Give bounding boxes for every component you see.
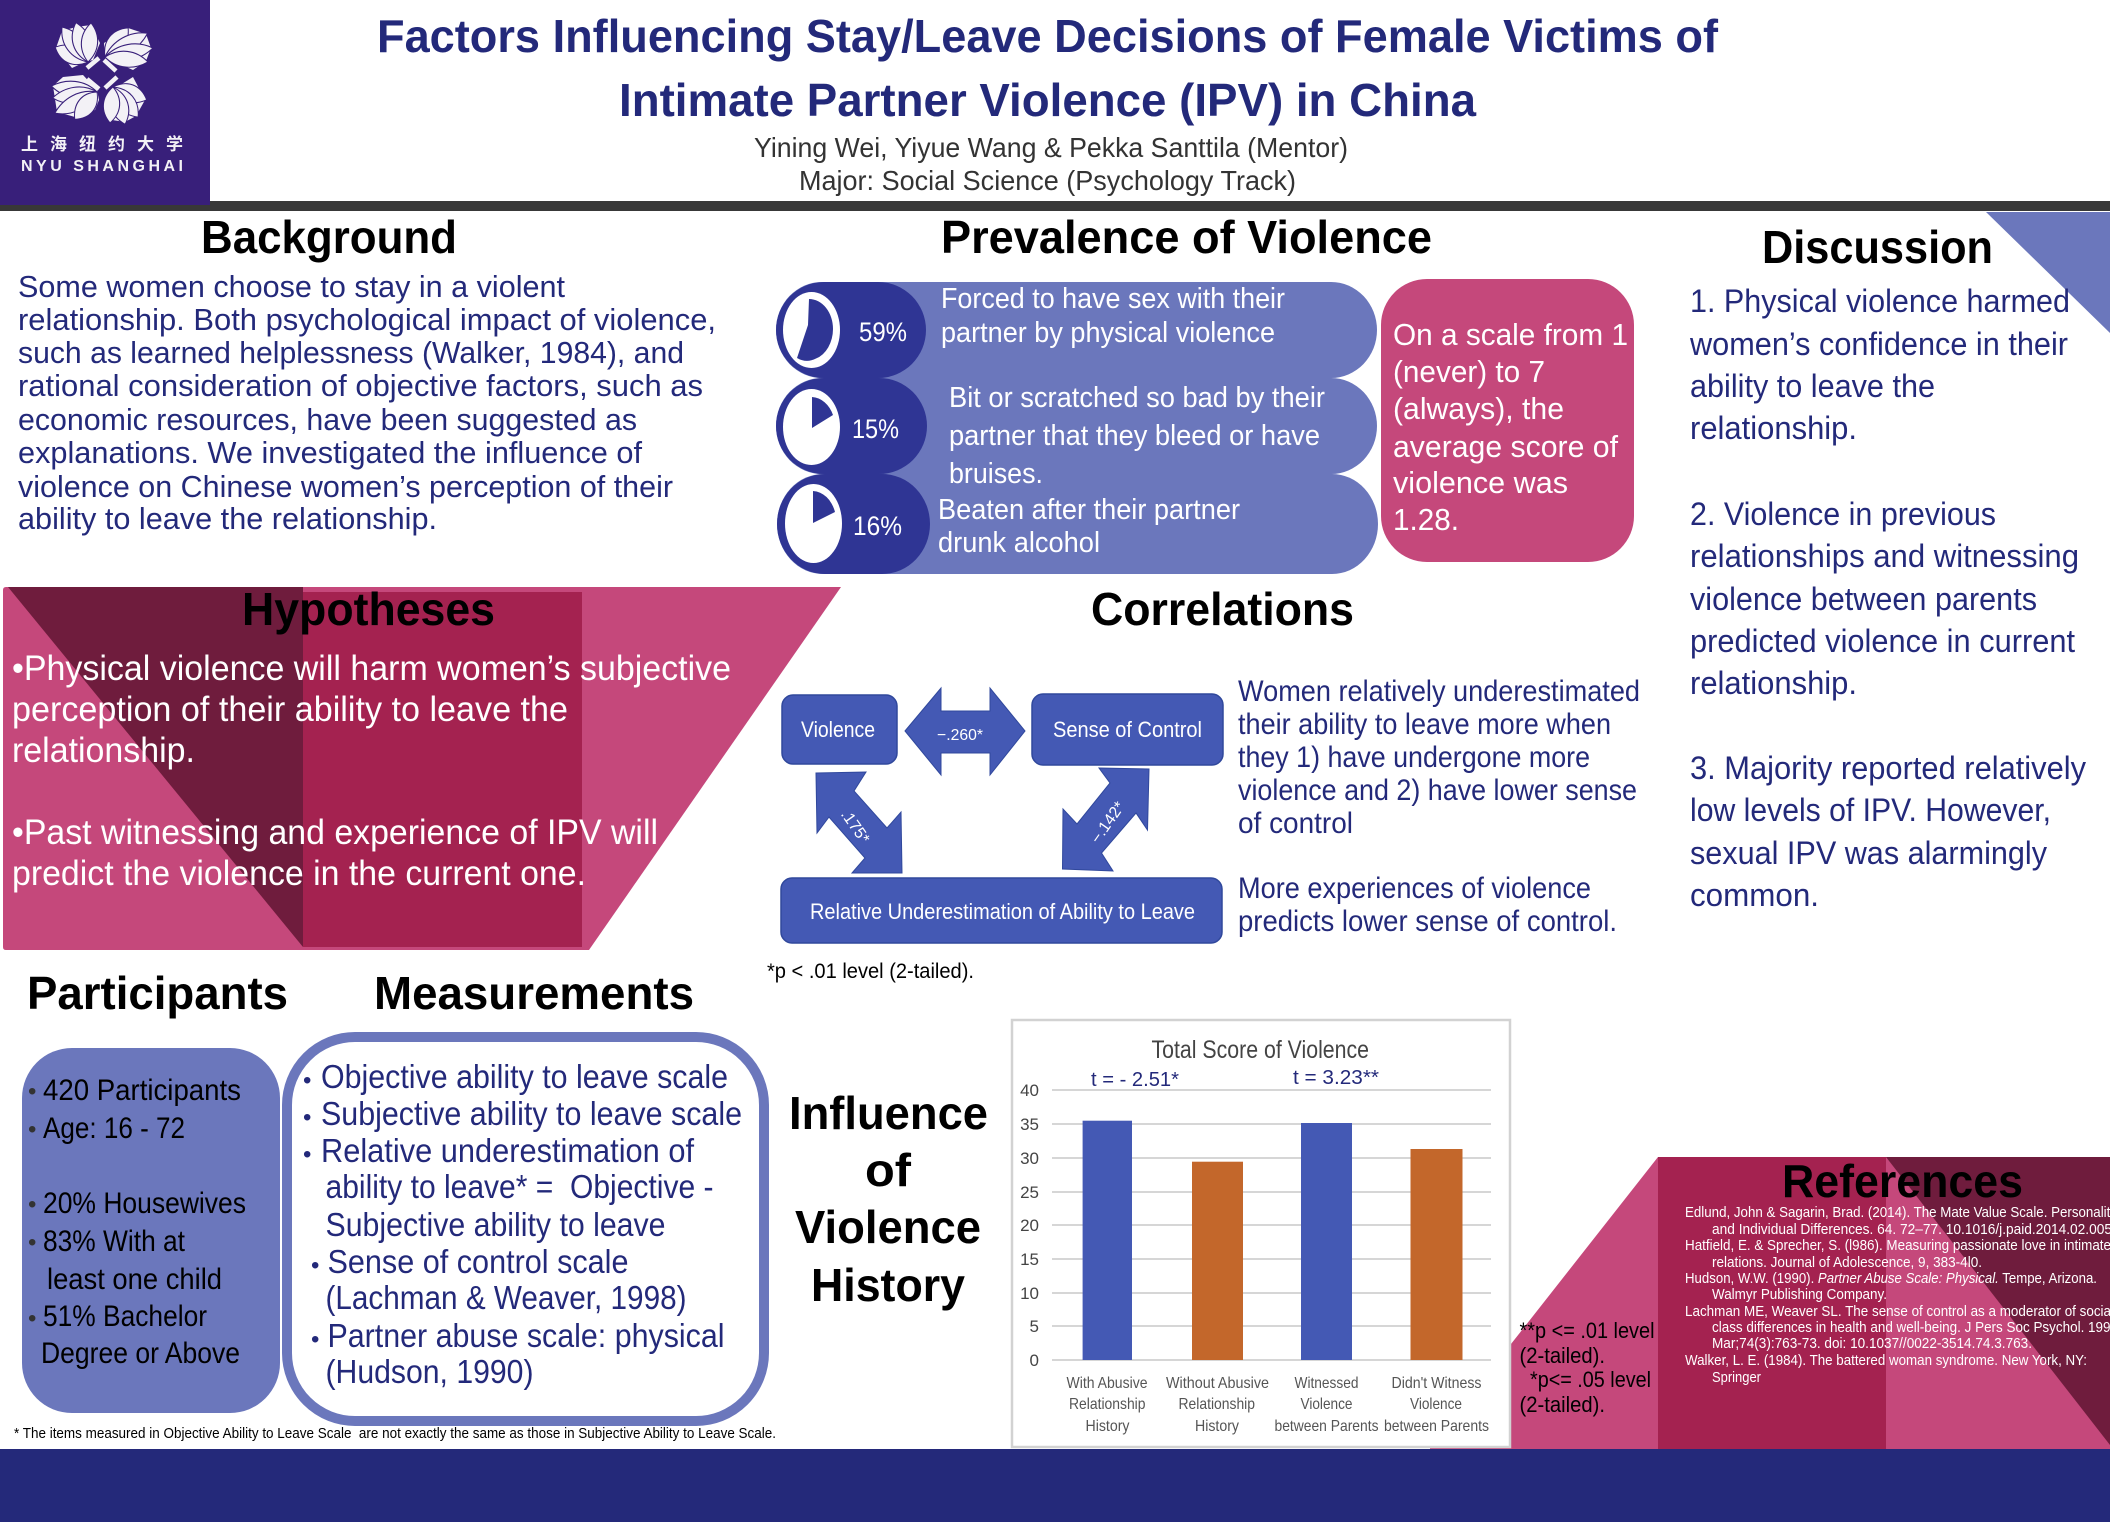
text: hypotheses list: •Past witnessing and experience of IPV will xyxy=(12,813,658,852)
title: Intimate Partner Violence (IPV) in China xyxy=(619,74,1476,126)
footnote: correlation significance: *p < .01 level (2-tailed). xyxy=(767,960,974,983)
panel: participants: • xyxy=(28,1078,36,1105)
authors and major xyxy=(754,132,1348,196)
text: discussion: 1. Physical violence harmed xyxy=(1690,283,2070,319)
text: correlation findings xyxy=(1238,675,1640,938)
text: hypotheses list: perception of their ability to leave the xyxy=(12,690,568,729)
panel: participants: • xyxy=(28,1229,36,1256)
box: relative underestimation xyxy=(781,878,1222,943)
text: references list: Hudson, W.W. (1990). Partner Abuse Scale: Physical. Tempe, Arizona. xyxy=(1685,1271,2097,1287)
heading: Influence of Violence History xyxy=(789,1087,988,1311)
x axis labels: between Parents xyxy=(1274,1418,1378,1435)
callout: average score: On a scale from 1 xyxy=(1393,317,1628,352)
footnote: measurement scales: * The items measured in Objective Ability to Leave Scale are not exactly the same as those in Subjective Ability to Leave Scale. xyxy=(14,1425,776,1442)
text: discussion: sexual IPV was alarmingly xyxy=(1690,835,2047,871)
icon: pie 16% xyxy=(785,484,842,563)
t statistic: witnessed violence: t = 3.23** xyxy=(1293,1067,1379,1089)
text: beaten xyxy=(938,494,1240,559)
text: discussion: low levels of IPV. However, xyxy=(1690,792,2051,828)
text: discussion: 3. Majority reported relatively xyxy=(1690,750,2086,786)
callout: average score: average score of xyxy=(1393,429,1618,464)
panel: measurements: • xyxy=(311,1252,319,1279)
x axis labels: Violence xyxy=(1300,1396,1353,1413)
icon: pie 59% xyxy=(783,292,840,368)
text: hypotheses list: •Physical violence will harm women’s subjective xyxy=(12,649,731,688)
text: discussion: women’s confidence in their xyxy=(1689,326,2068,362)
panel: measurements: • xyxy=(303,1104,311,1131)
header rule xyxy=(0,201,2110,211)
heading: References: References xyxy=(1782,1155,2023,1207)
authors and major: Major: Social Science (Psychology Track) xyxy=(799,165,1296,196)
panel: measurements: (Lachman & Weaver, 1998) xyxy=(326,1279,686,1316)
arrow: sense of control to underestimation xyxy=(1062,768,1149,871)
x axis labels: between Parents xyxy=(1384,1418,1489,1435)
callout: average score: (never) to 7 xyxy=(1393,354,1545,389)
diagram: correlations xyxy=(781,688,1223,943)
text: correlation findings: they 1) have undergone more xyxy=(1238,741,1590,774)
text: background: Some women choose to stay in a violent xyxy=(18,269,565,304)
x axis labels: Without Abusive xyxy=(1166,1375,1269,1392)
text: hypotheses list: predict the violence in the current one. xyxy=(12,854,586,893)
panel: measurements: Relative underestimation of xyxy=(321,1132,695,1169)
text: beaten: drunk alcohol xyxy=(938,527,1100,559)
text: references list xyxy=(1685,1205,2110,1386)
text: significance levels: (2-tailed). xyxy=(1520,1343,1605,1368)
text: discussion: predicted violence in current xyxy=(1690,623,2075,659)
text: forced sex: partner by physical violence xyxy=(941,317,1275,349)
text: bit or scratched: bruises. xyxy=(949,458,1043,490)
text: discussion: relationship. xyxy=(1690,410,1857,446)
x axis labels: Didn't Witness xyxy=(1392,1375,1482,1392)
panel: measurements: (Hudson, 1990) xyxy=(326,1353,534,1390)
panel: measurements: ability to leave* = Objective - xyxy=(326,1168,714,1205)
chart title: Total Score of Violence xyxy=(1152,1036,1369,1064)
text: discussion: violence between parents xyxy=(1690,581,2037,617)
y axis labels: 10 xyxy=(1020,1284,1039,1303)
arrow: sense of control to underestimation: −.142* xyxy=(1088,799,1129,847)
panel: measurements: Subjective ability to leave scale xyxy=(321,1095,742,1132)
x axis labels: Relationship xyxy=(1178,1396,1255,1413)
heading: Influence of Violence History: of xyxy=(865,1144,912,1196)
heading: Hypotheses: Hypotheses xyxy=(242,583,495,635)
text: correlation findings: More experiences of violence xyxy=(1238,872,1591,905)
logo: NYU Shanghai: NYU SHANGHAI xyxy=(21,158,183,175)
panel: participants: 51% Bachelor xyxy=(43,1300,207,1333)
panel: references background xyxy=(1430,1157,2110,1450)
box: relative underestimation: Relative Underestimation of Ability to Leave xyxy=(810,899,1195,924)
panel: measurements: Partner abuse scale: physical xyxy=(328,1317,724,1354)
text: references list: relations. Journal of Adolescence, 9, 383-4l0. xyxy=(1712,1255,1982,1271)
panel: measurements: Objective ability to leave scale xyxy=(321,1058,728,1095)
y axis labels: 35 xyxy=(1020,1115,1039,1134)
text: background: rational consideration of objective factors, such as xyxy=(18,368,703,403)
text: discussion: relationship. xyxy=(1690,665,1857,701)
heading: Influence of Violence History: History xyxy=(811,1259,965,1311)
text: discussion: relationships and witnessing xyxy=(1690,538,2079,574)
text: background: economic resources, have been suggested as xyxy=(18,402,637,437)
decorative corner triangle xyxy=(1986,212,2110,333)
text: significance levels: *p<= .05 level xyxy=(1530,1367,1651,1392)
panel: measurements: • xyxy=(303,1067,311,1094)
text: background: violence on Chinese women’s perception of their xyxy=(18,469,673,504)
text: correlation findings: of control xyxy=(1238,807,1353,840)
text: discussion: 2. Violence in previous xyxy=(1690,496,1996,532)
text: correlation findings: Women relatively underestimated xyxy=(1238,675,1640,708)
heading: Prevalence of Violence: Prevalence of Violence xyxy=(941,211,1432,263)
panel: participants: Age: 16 - 72 xyxy=(43,1112,185,1145)
text: hypotheses list xyxy=(12,649,731,893)
box: violence: Violence xyxy=(801,717,875,742)
panel: measurements: • xyxy=(303,1141,311,1168)
text: discussion xyxy=(1689,283,2086,913)
text: beaten: Beaten after their partner xyxy=(938,494,1240,526)
x axis labels: With Abusive xyxy=(1066,1375,1148,1392)
heading: Background: Background xyxy=(201,211,457,263)
t statistic: abuse history: t = - 2.51* xyxy=(1091,1069,1179,1091)
panel: participants: 83% With at xyxy=(43,1225,186,1258)
arrow: violence to sense of control xyxy=(905,688,1025,775)
heading: Influence of Violence History: Violence xyxy=(795,1201,981,1253)
text: background: relationship. Both psychological impact of violence, xyxy=(18,302,716,337)
panel: measurements: Subjective ability to leave xyxy=(326,1206,666,1243)
heading: Measurements: Measurements xyxy=(374,967,694,1019)
box: sense of control: Sense of Control xyxy=(1053,717,1202,742)
panel: measurements: Sense of control scale xyxy=(328,1243,628,1280)
heading: Influence of Violence History: Influence xyxy=(789,1087,988,1139)
title: Factors Influencing Stay/Leave Decisions of Female Victims of xyxy=(377,10,1719,62)
y axis labels: 15 xyxy=(1020,1250,1039,1269)
callout: average score: 1.28. xyxy=(1393,502,1459,537)
panel: participants: • xyxy=(28,1305,36,1332)
text: forced sex: Forced to have sex with their xyxy=(941,283,1285,315)
panel: measurements: • xyxy=(311,1326,319,1353)
x axis labels xyxy=(1066,1375,1489,1435)
x axis labels: Witnessed xyxy=(1294,1375,1358,1392)
text: correlation findings: violence and 2) have lower sense xyxy=(1238,774,1637,807)
box: sense of control xyxy=(1032,694,1223,765)
text: bit or scratched xyxy=(949,382,1325,490)
text: background xyxy=(18,269,716,536)
heading: Correlations: Correlations xyxy=(1091,583,1354,635)
panel: measurements xyxy=(287,1037,764,1421)
logo: NYU Shanghai xyxy=(0,0,210,205)
arrow: violence to sense of control: −.260* xyxy=(937,727,983,744)
text: references list: Walmyr Publishing Company. xyxy=(1712,1287,1887,1303)
y axis labels: 40 xyxy=(1020,1081,1039,1100)
title xyxy=(377,10,1719,126)
x axis labels: Violence xyxy=(1410,1396,1462,1413)
panel: participants: 20% Housewives xyxy=(43,1187,246,1220)
text: significance levels xyxy=(1520,1318,1654,1417)
callout: average score: violence was xyxy=(1393,465,1568,500)
y axis labels: 0 xyxy=(1030,1351,1039,1370)
heading: Discussion: Discussion xyxy=(1762,221,1993,273)
panel: participants: 420 Participants xyxy=(43,1074,241,1107)
arrow: violence to underestimation xyxy=(816,772,902,873)
text: background: ability to leave the relationship. xyxy=(18,501,437,536)
callout: average score xyxy=(1381,279,1634,562)
label: 59 percent: 59% xyxy=(859,317,907,347)
text: significance levels: (2-tailed). xyxy=(1520,1392,1605,1417)
text: correlation findings: predicts lower sense of control. xyxy=(1238,905,1617,938)
text: bit or scratched: Bit or scratched so bad by their xyxy=(949,382,1325,414)
y axis labels: 5 xyxy=(1030,1317,1039,1336)
box: violence xyxy=(782,695,897,764)
label: 16 percent: 16% xyxy=(853,511,902,541)
icon: pie 15% xyxy=(783,389,840,465)
text: references list: Mar;74(3):763-73. doi: 10.1037//0022-3514.74.3.763. xyxy=(1712,1336,2032,1352)
y axis labels xyxy=(1020,1081,1039,1370)
footer band xyxy=(0,1449,2110,1522)
text: forced sex xyxy=(941,283,1285,349)
chart: total score of violence xyxy=(1012,1020,1510,1447)
text: bit or scratched: partner that they bleed or have xyxy=(949,420,1320,452)
text: references list: Springer xyxy=(1712,1370,1761,1386)
text: hypotheses list: relationship. xyxy=(12,731,195,770)
text: references list: Walker, L. E. (1984). The battered woman syndrome. New York, NY: xyxy=(1685,1353,2087,1369)
text: discussion: common. xyxy=(1690,877,1819,913)
y axis labels: 30 xyxy=(1020,1149,1039,1168)
panel: participants: • xyxy=(28,1116,36,1143)
panel: participants: • xyxy=(28,1191,36,1218)
text: significance levels: **p <= .01 level xyxy=(1520,1318,1654,1343)
x axis labels: History xyxy=(1195,1418,1239,1435)
x axis labels: History xyxy=(1086,1418,1130,1435)
text: discussion: ability to leave the xyxy=(1690,368,1935,404)
panel: participants: least one child xyxy=(47,1263,222,1296)
heading: Participants: Participants xyxy=(27,967,288,1019)
y axis labels: 25 xyxy=(1020,1183,1039,1202)
label: 15 percent: 15% xyxy=(852,414,899,444)
panel: participants: Degree or Above xyxy=(41,1337,240,1370)
arrow: violence to underestimation: .175* xyxy=(837,807,872,847)
panel: prevalence pills xyxy=(776,282,1378,574)
text: correlation findings: their ability to leave more when xyxy=(1238,708,1611,741)
logo: NYU Shanghai: 上海纽约大学 xyxy=(21,134,183,154)
text: background: explanations. We investigated the influence of xyxy=(18,435,642,470)
y axis labels: 20 xyxy=(1020,1216,1039,1235)
callout: average score: (always), the xyxy=(1393,391,1564,426)
panel: hypotheses xyxy=(3,583,841,950)
panel: participants xyxy=(22,1048,280,1413)
x axis labels: Relationship xyxy=(1069,1396,1146,1413)
text: background: such as learned helplessness (Walker, 1984), and xyxy=(18,335,684,370)
authors and major: Yining Wei, Yiyue Wang & Pekka Santtila (Mentor) xyxy=(754,132,1348,163)
bars xyxy=(1083,1121,1462,1360)
